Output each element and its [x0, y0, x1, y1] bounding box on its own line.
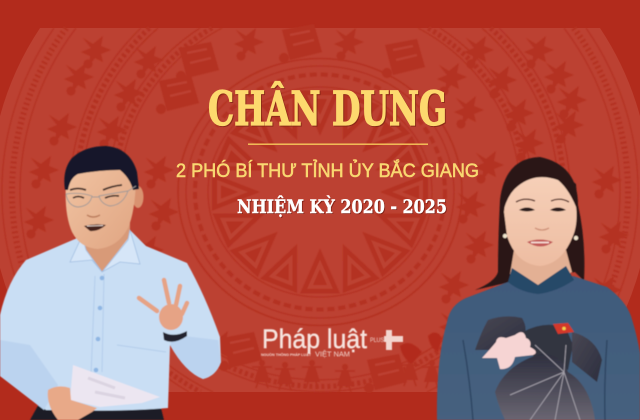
paper text [88, 378, 125, 398]
title [208, 81, 448, 138]
title divider [248, 144, 428, 145]
raised hand [139, 280, 187, 330]
shirt shading [0, 335, 221, 410]
logo: Pháp luật Plus: PLUS [370, 337, 385, 344]
logo: Pháp luật Plus: VIỆT NAM [315, 350, 350, 358]
lotus flower [482, 332, 536, 369]
neck [510, 250, 572, 292]
lotus leaf large [495, 354, 595, 420]
long hair [475, 157, 584, 290]
term label: NHIỆM KỲ 2020 - 2025 [238, 196, 448, 219]
shirt [0, 230, 221, 411]
earrings [503, 234, 507, 238]
ao dai [437, 276, 640, 420]
background: drum star triangles [212, 90, 428, 294]
portrait: female deputy secretary [437, 157, 640, 420]
mouth [84, 224, 106, 231]
hair [64, 146, 139, 190]
face [66, 160, 136, 249]
ear [132, 186, 144, 208]
sleeve seams [463, 340, 607, 420]
collar [70, 230, 140, 272]
watch [163, 331, 187, 342]
hairline [500, 168, 578, 216]
portrait: male deputy secretary [0, 146, 221, 420]
flag pin [553, 323, 574, 334]
term label: NHIỆM KỲ 2020 - 2025 [237, 195, 447, 218]
lips [527, 240, 553, 246]
collar [508, 266, 574, 294]
glasses [66, 186, 136, 207]
chest pocket [117, 345, 166, 352]
subtitle: 2 PHÓ BÍ THƯ TỈNH ỦY BẮC GIANG [176, 160, 479, 182]
lotus leaf center [523, 325, 573, 370]
title: CHÂN DUNG [208, 81, 447, 137]
placket and buttons [91, 274, 104, 376]
lower hand [48, 386, 97, 420]
title: CHÂN DUNG [209, 82, 448, 138]
leaf veins [510, 345, 580, 420]
neck [82, 220, 130, 272]
logo: Pháp luật Plus: Pháp luật [262, 324, 367, 354]
logo: Pháp luật Plus: NGUỒN THÔNG PHÁP LUẬT [261, 352, 312, 357]
nose shadow [535, 228, 549, 230]
eyes [519, 208, 566, 212]
lotus leaf right [572, 332, 602, 382]
brows [516, 199, 569, 202]
face [504, 175, 577, 266]
brows [70, 185, 122, 190]
logo: Pháp luật Plus [261, 324, 403, 358]
papers [70, 365, 160, 407]
trousers [30, 402, 164, 420]
eyes [73, 196, 119, 198]
lotus leaf left [475, 316, 526, 350]
nose [87, 215, 100, 217]
